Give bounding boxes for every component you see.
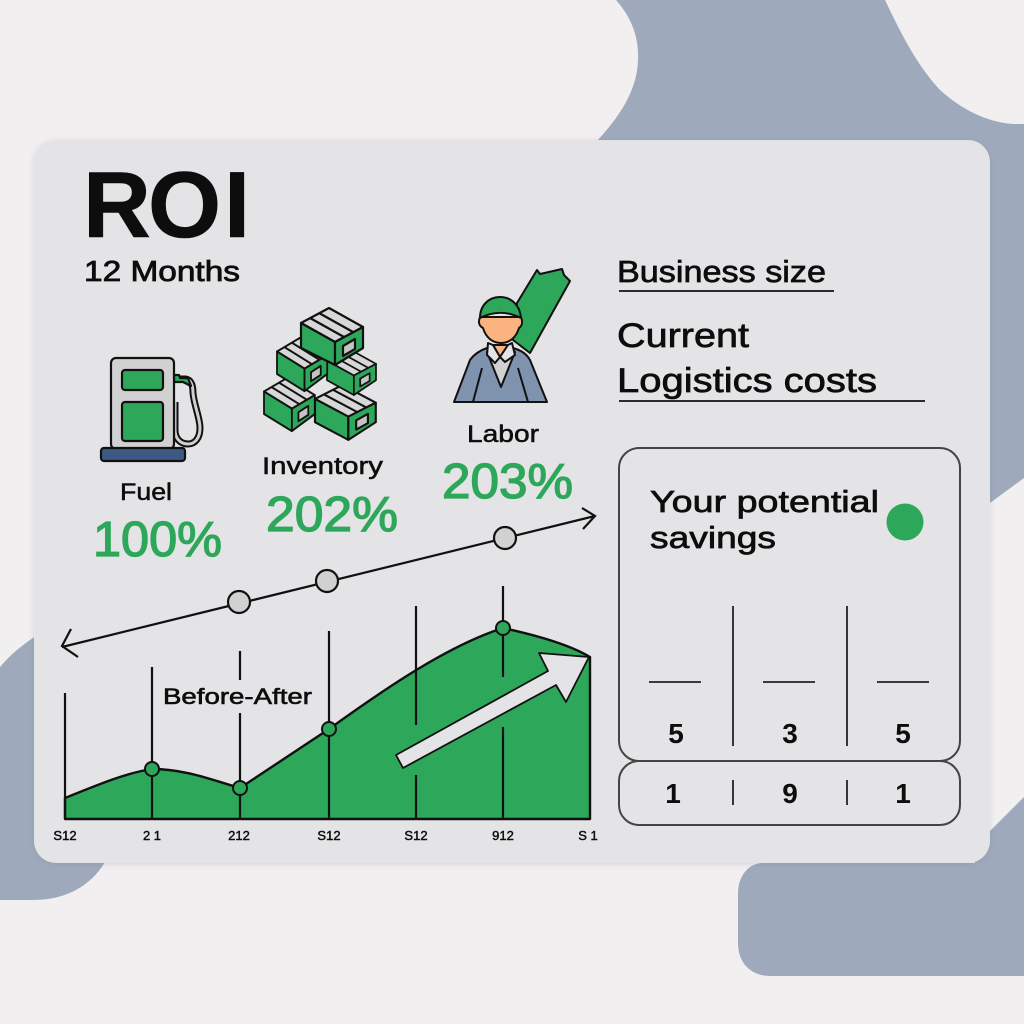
axis labels: [53, 828, 598, 843]
value: labor: 203%: [442, 455, 573, 509]
trend arrow line: [62, 508, 595, 657]
title: ROI: [83, 152, 250, 257]
status dot: [886, 504, 924, 540]
timeline markers: [228, 527, 516, 613]
data points: [145, 621, 510, 795]
form: current logistics costs: [617, 317, 925, 401]
area fill: [65, 628, 590, 819]
panel: savings counter: 9: [782, 778, 798, 809]
white growth arrow: [396, 653, 589, 768]
savings digits: 5: [895, 718, 911, 749]
box: middle right: [327, 349, 376, 395]
label: fuel: Fuel: [120, 479, 172, 506]
savings digits: [668, 718, 911, 749]
savings heading: savings: [650, 520, 776, 555]
savings digits: 3: [782, 718, 798, 749]
panel: savings counter: 1: [665, 778, 681, 809]
chart label: Before-After: [163, 684, 312, 709]
savings digits: 5: [668, 718, 684, 749]
panel: savings counter: [619, 761, 960, 825]
panel: main card: [34, 140, 990, 863]
panel: savings counter: 1: [895, 778, 911, 809]
axis labels: S12: [53, 828, 77, 843]
icon: fuel pump: [101, 358, 200, 461]
subtitle: 12 Months: [84, 256, 240, 288]
box: bottom right: [315, 385, 376, 440]
form: current logistics costs: Current: [617, 317, 750, 355]
box: bottom left: [264, 378, 315, 431]
form: business size: Business size: [617, 254, 826, 289]
box: middle left: [277, 338, 327, 391]
savings heading: [650, 484, 879, 555]
axis labels: 912: [492, 828, 514, 843]
box: top: [301, 308, 363, 365]
axis labels: S12: [404, 828, 428, 843]
value: fuel: 100%: [93, 513, 222, 567]
icon: labor worker with check mark: [454, 269, 570, 402]
axis labels: 2 1: [143, 828, 161, 843]
axis labels: S 1: [578, 828, 598, 843]
axis labels: 212: [228, 828, 250, 843]
icon: inventory boxes: [264, 308, 376, 440]
label: labor: Labor: [467, 421, 539, 448]
form: current logistics costs: Logistics costs: [617, 362, 877, 400]
label: inventory: Inventory: [262, 453, 383, 480]
savings heading: Your potential: [650, 484, 879, 519]
area chart: before-after: [53, 586, 598, 843]
panel: your potential savings: [619, 448, 960, 761]
value: inventory: 202%: [266, 488, 398, 542]
axis labels: S12: [317, 828, 341, 843]
